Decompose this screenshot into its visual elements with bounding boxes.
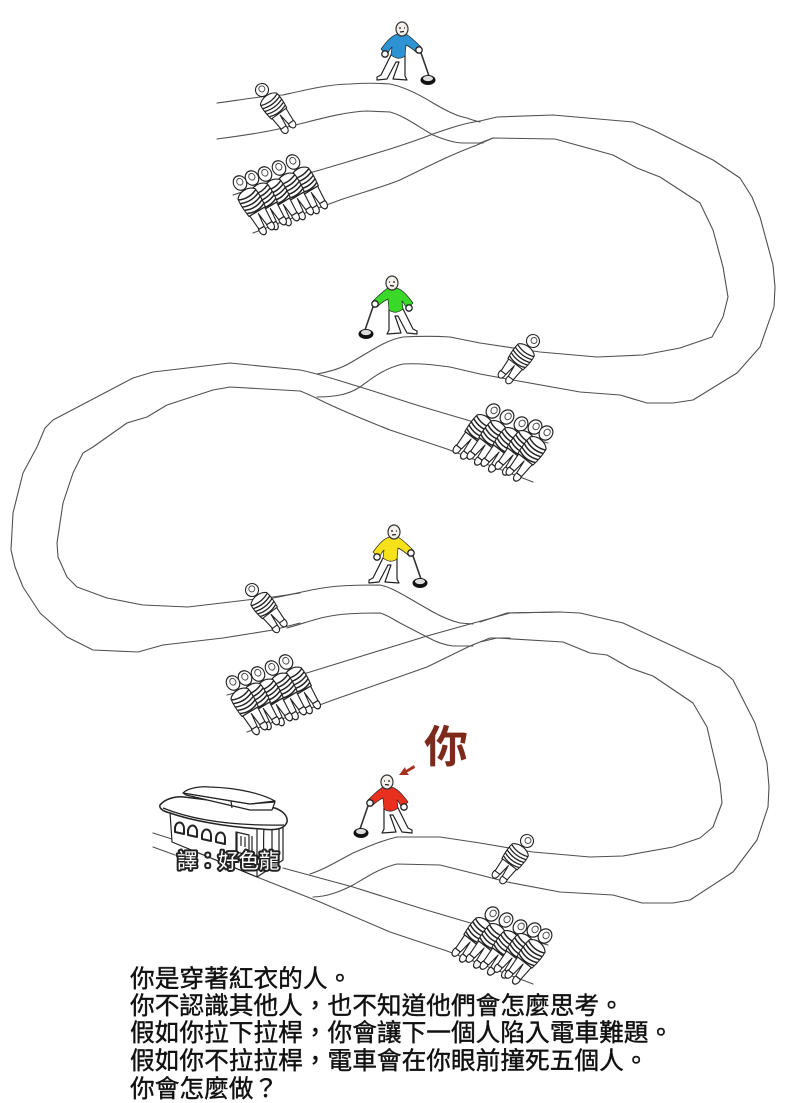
tracks at first stage xyxy=(217,83,493,233)
caption: 假如你不拉拉桿，電車會在你眼前撞死五個人。 xyxy=(130,1047,648,1075)
five people on main track, stage 1 xyxy=(227,150,331,237)
five people on main track, stage 4 xyxy=(449,902,558,987)
person on side track, stage 1 xyxy=(250,79,300,136)
translator credit: 譯：好色龍 xyxy=(177,850,280,873)
figure: green man with lever xyxy=(358,276,417,339)
five people on main track, stage 2 xyxy=(450,399,559,484)
caption xyxy=(130,965,673,1103)
caption: 假如你拉下拉桿，你會讓下一個人陷入電車難題。 xyxy=(130,1019,673,1047)
person on side track, stage 2 xyxy=(495,329,545,387)
track loop: right side, third to fourth stage xyxy=(480,612,769,903)
tracks at fourth stage xyxy=(153,833,548,984)
figure: red man with lever (you) xyxy=(354,775,412,838)
caption: 你不認識其他人，也不知道他們會怎麼思考。 xyxy=(130,992,624,1020)
figure: yellow man with lever xyxy=(369,525,428,588)
person on side track, stage 4 xyxy=(489,829,539,887)
tracks at second stage xyxy=(300,336,548,482)
label: you: 你 xyxy=(424,723,468,772)
caption: 你會怎麼做？ xyxy=(130,1075,278,1103)
figure: blue man with lever xyxy=(377,22,436,85)
track loop: left side, second to third stage xyxy=(11,363,300,652)
trolley xyxy=(160,787,287,877)
caption: 你是穿著紅衣的人。 xyxy=(130,965,352,993)
five people on main track, stage 3 xyxy=(220,650,324,737)
arrow pointing to red man xyxy=(399,765,415,775)
track loop: right side, first to second stage xyxy=(480,115,775,403)
person on side track, stage 3 xyxy=(240,578,291,635)
tracks at third stage xyxy=(227,585,560,732)
